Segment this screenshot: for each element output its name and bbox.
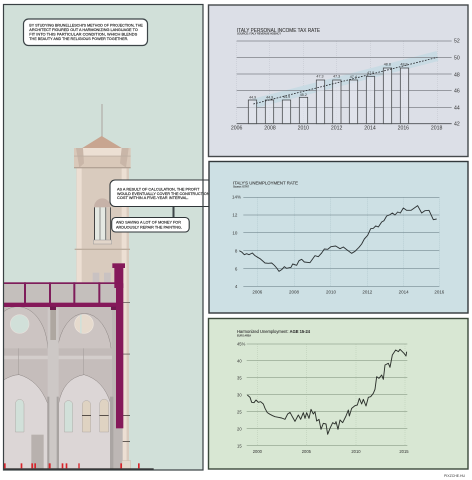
line chart: unemployment: 2012 bbox=[362, 290, 373, 295]
line chart: youth unemployment: 35 bbox=[237, 376, 242, 381]
bar chart with trend line: 48.8 bbox=[384, 63, 391, 67]
line chart: unemployment: 8 bbox=[235, 248, 238, 253]
bar chart with trend line: 2014 bbox=[364, 126, 376, 132]
heading: youth unemployment bbox=[237, 329, 310, 338]
credit: PIXZCHE.HU bbox=[444, 473, 465, 478]
bar chart with trend line bbox=[231, 39, 460, 132]
callout: profit bbox=[110, 180, 216, 206]
line chart: youth unemployment: 25 bbox=[237, 409, 242, 414]
nave building elevation bbox=[4, 263, 154, 470]
bar chart with trend line: 45.2 bbox=[300, 93, 307, 97]
bar chart with trend line: 44.9 bbox=[249, 96, 256, 100]
panel: unemployment rate chart bbox=[209, 162, 468, 313]
line chart: youth unemployment: 20 bbox=[237, 426, 242, 431]
line chart: unemployment: 10 bbox=[232, 230, 238, 235]
bar chart with trend line: 2008 bbox=[264, 126, 276, 132]
bar chart with trend line: 48.8 bbox=[400, 63, 408, 67]
line chart: unemployment: 6 bbox=[235, 266, 238, 271]
heading: unemployment bbox=[233, 180, 298, 188]
line chart: unemployment: 14% bbox=[232, 195, 241, 200]
bar chart with trend line: 2012 bbox=[331, 126, 343, 132]
callout: method of projection: BY STUDYING BRUNELLESCHI'S METHOD OF PROJECTION, THE bbox=[29, 22, 143, 28]
callout: repair paintings bbox=[112, 218, 189, 232]
callout connector bbox=[172, 206, 174, 218]
line chart: unemployment: 2010 bbox=[326, 290, 336, 295]
line chart: youth unemployment: 30 bbox=[237, 393, 242, 398]
callout: profit: WOULD EVENTUALLY COVER THE CONSTRUCTION bbox=[117, 191, 210, 196]
line chart: unemployment bbox=[232, 195, 445, 295]
heading: income tax: ITALY PERSONAL INCOME TAX RATE bbox=[237, 28, 320, 34]
line chart: unemployment: 4 bbox=[235, 284, 238, 289]
bar chart with trend line: 47.8 bbox=[367, 71, 374, 75]
upper gallery bbox=[4, 282, 119, 310]
panel: income tax chart bbox=[208, 5, 468, 156]
heading: income tax bbox=[237, 28, 320, 36]
line chart: youth unemployment bbox=[237, 342, 409, 454]
heading: unemployment: Source: ISTAT bbox=[233, 186, 250, 188]
bar chart with trend line: 47.4 bbox=[350, 75, 357, 79]
line chart: unemployment: 2016 bbox=[434, 290, 445, 295]
callout: repair paintings: ARDUOUSLY REPAIR THE PAINTING. bbox=[116, 225, 182, 230]
line chart: unemployment: 2008 bbox=[289, 290, 299, 295]
line chart: youth unemployment: 15 bbox=[237, 443, 242, 448]
callout: profit: AS A RESULT OF CALCULATION, THE PROFIT bbox=[117, 186, 200, 191]
heading: income tax: SOURCE: ITALY REVENUE AGENCY bbox=[237, 32, 281, 36]
callout: method of projection: THE BEAUTY AND THE RELIGIOUS POWER TOGETHER. bbox=[29, 36, 128, 41]
line chart: unemployment: 12 bbox=[232, 213, 238, 218]
bar chart with trend line: 2016 bbox=[398, 126, 409, 132]
bar chart with trend line: 46 bbox=[454, 89, 460, 95]
callout: method of projection: ARCHITECT FIGURED OUT A HARMONIZING LANGUAGE TO bbox=[29, 27, 138, 32]
magenta column bbox=[112, 263, 125, 428]
callout: repair paintings: AND SAVING A LOT OF MONEY FOR bbox=[116, 220, 181, 225]
bar chart with trend line: 44 bbox=[454, 106, 460, 112]
bar chart with trend line: 48 bbox=[454, 72, 460, 78]
line chart: youth unemployment: 2005 bbox=[302, 449, 312, 454]
bar chart with trend line: 47.3 bbox=[316, 75, 324, 79]
bar chart with trend line: 44.9 bbox=[266, 96, 273, 100]
bar chart with trend line: 2006 bbox=[231, 126, 243, 132]
tower illustration bbox=[74, 104, 131, 469]
callout: method of projection bbox=[24, 19, 148, 46]
line chart: youth unemployment: 2015 bbox=[399, 449, 409, 454]
line chart: youth unemployment: 45% bbox=[237, 342, 246, 347]
heading: unemployment: ITALY'S UNEMPLOYMENT RATE bbox=[233, 180, 298, 186]
ground line with red markers bbox=[4, 463, 154, 470]
line chart: youth unemployment: 2000 bbox=[253, 449, 263, 454]
bar chart with trend line: 42 bbox=[454, 122, 460, 128]
bar chart with trend line: 2018 bbox=[431, 126, 443, 132]
line chart: unemployment: 2014 bbox=[399, 290, 409, 295]
bar chart with trend line: 44.9 bbox=[283, 95, 290, 99]
callout: method of projection: FIT INTO THIS PARTICULAR CONDITION, WHICH BLENDS bbox=[29, 32, 138, 37]
bar chart with trend line: 2010 bbox=[298, 126, 309, 132]
bar chart with trend line: 47.3 bbox=[333, 75, 340, 79]
bar chart with trend line: 50 bbox=[454, 55, 460, 61]
callout: profit: COST WITHIN A FIVE-YEAR INTERVAL. bbox=[117, 195, 188, 200]
left panel frame bbox=[4, 4, 203, 470]
line chart: youth unemployment: 2010 bbox=[351, 449, 361, 454]
panel: architecture comic bbox=[4, 4, 216, 470]
line chart: unemployment: 2006 bbox=[252, 290, 263, 295]
heading: youth unemployment: EURO AREA bbox=[237, 334, 251, 338]
heading: youth unemployment: Harmonized Unemployment: AGE 15-24 bbox=[237, 329, 310, 335]
bar chart with trend line: 52 bbox=[454, 39, 460, 45]
line chart: youth unemployment: 40 bbox=[237, 358, 242, 363]
panel: youth unemployment chart bbox=[208, 318, 468, 469]
